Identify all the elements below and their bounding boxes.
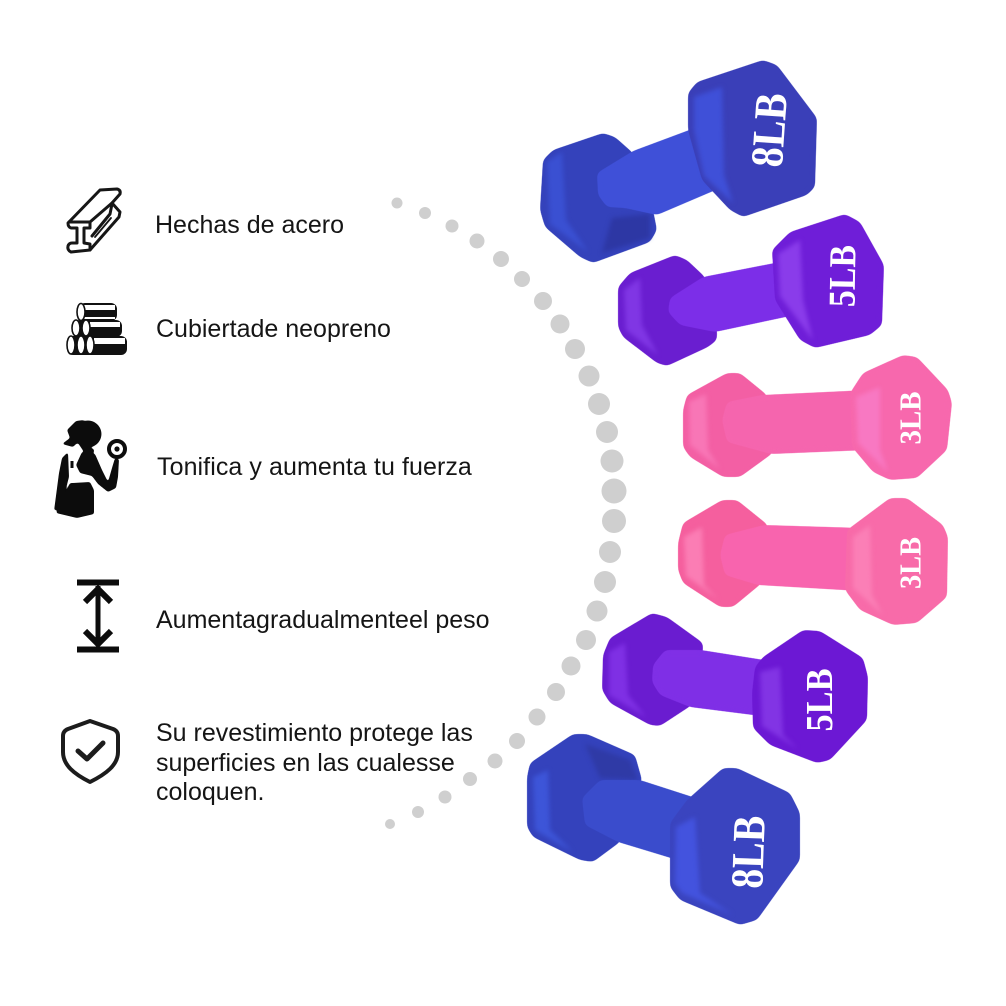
text block: protective coating [156, 719, 473, 806]
dumbbell: 8LB top [540, 60, 817, 263]
dumbbell: 3LB upper [683, 355, 952, 480]
dumbbell: 3LB lower [678, 498, 948, 625]
dumbbell: 8LB bottom: 8LB [721, 815, 775, 889]
dumbbell: 3LB lower: 3LB [892, 537, 928, 589]
dumbbell: 5LB top: 5LB [821, 245, 865, 307]
dumbbell: 5LB lower [602, 613, 868, 763]
heading: Cubiertade neopreno: Cubiertade neopreno [156, 315, 391, 343]
heading: Hechas de acero: Hechas de acero [155, 211, 344, 239]
text block: protective coating: coloquen. [156, 778, 264, 806]
dumbbell: 8LB top: 8LB [741, 91, 797, 169]
heading: Aumentagradualmenteel peso: Aumentagradualmenteel peso [156, 606, 490, 634]
heading: Tonifica y aumenta tu fuerza: Tonifica y aumenta tu fuerza [157, 453, 472, 481]
dumbbell: 3LB upper: 3LB [892, 392, 928, 444]
dumbbell: 5LB lower: 5LB [799, 668, 841, 732]
dumbbell: 8LB bottom [527, 734, 800, 925]
text block: protective coating: Su revestimiento protege las [156, 719, 473, 747]
text block: protective coating: superficies en las cualesse [156, 748, 455, 776]
dumbbell: 5LB top [618, 214, 884, 366]
